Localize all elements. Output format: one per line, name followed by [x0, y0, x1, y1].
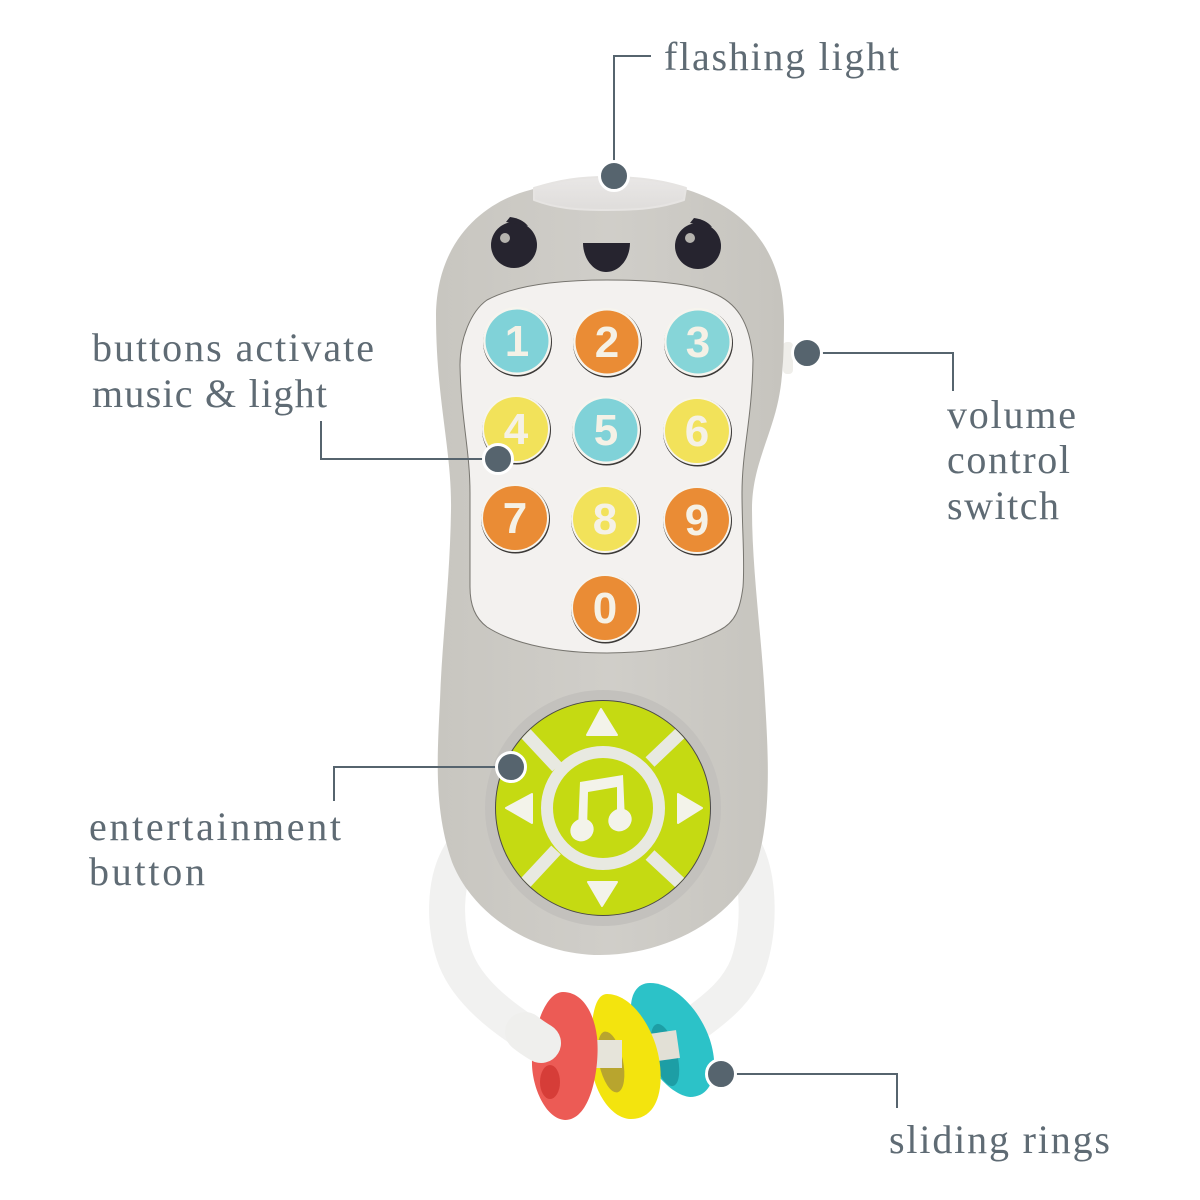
button 8: 8: [593, 495, 617, 544]
panel: keypad: [460, 280, 753, 653]
button 3: 3: [686, 318, 710, 367]
callout: buttons activate: [92, 325, 512, 474]
callout: volume control switch: switch: [947, 483, 1059, 528]
icon: sliding rings: [525, 983, 714, 1120]
button 2: [573, 308, 642, 378]
icon: teething ring: [447, 850, 757, 1035]
button 6: 6: [685, 407, 709, 456]
button 5: 5: [594, 406, 618, 455]
teal ring: [631, 983, 714, 1097]
button 2: 2: [595, 318, 619, 367]
callout: volume control switch: [792, 338, 1076, 528]
button 1: 1: [505, 317, 529, 366]
callout: volume control switch: control: [947, 437, 1070, 482]
red ring: [532, 992, 598, 1120]
callout: entertainment button: entertainment: [89, 804, 341, 849]
callout: buttons activate: music & light: [92, 371, 327, 416]
callout: flashing light: flashing light: [664, 34, 899, 79]
button 1: [483, 307, 552, 376]
button 9: 9: [685, 496, 709, 545]
inner band: [600, 1044, 678, 1053]
button 4: [482, 395, 551, 464]
callout: flashing light: [600, 34, 899, 190]
button 3: [664, 308, 733, 378]
icon: face: [491, 217, 721, 272]
callout: buttons activate: buttons activate: [92, 325, 374, 370]
button 5: [572, 396, 641, 466]
button 4: 4: [504, 405, 529, 454]
left band end: [525, 1032, 541, 1043]
button 6: [663, 397, 732, 466]
callout: sliding rings: [706, 1060, 1110, 1162]
button 9: [663, 486, 732, 556]
callout: entertainment button: [89, 752, 526, 894]
callout: sliding rings: sliding rings: [889, 1117, 1110, 1162]
icon: music note: [566, 775, 636, 846]
callout: volume control switch: volume: [947, 392, 1076, 437]
button 0: 0: [593, 584, 617, 633]
button 7: [481, 484, 550, 554]
button 7: 7: [503, 494, 527, 543]
middle band: [590, 1040, 622, 1068]
button 0: [571, 574, 640, 644]
button 8: [571, 485, 640, 554]
icon: remote body: [436, 177, 793, 955]
callout: entertainment button: button: [89, 849, 205, 894]
yellow ring: [591, 994, 661, 1119]
icon: entertainment button: [485, 690, 721, 926]
